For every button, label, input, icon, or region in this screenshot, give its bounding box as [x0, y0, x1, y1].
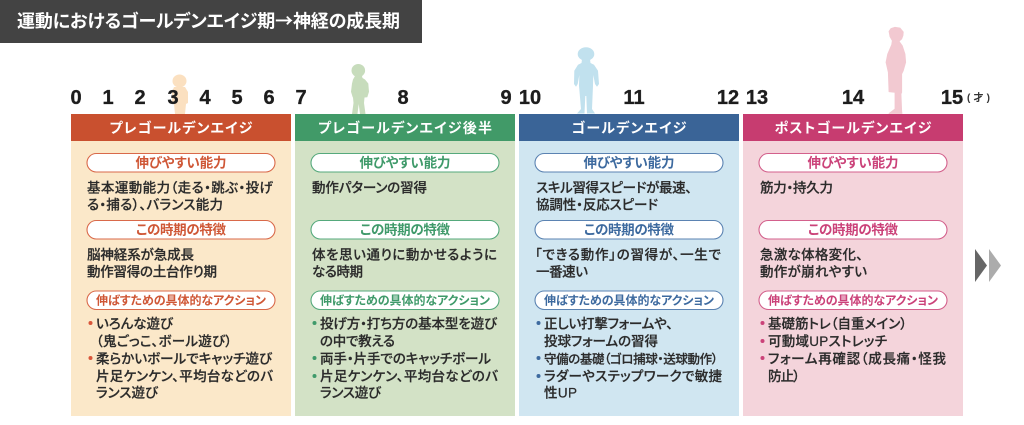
text: features 3: 「できる動作」の習得が、一生で — [535, 246, 721, 262]
age scale — [70, 87, 990, 109]
list: actions 2: 片足ケンケン、平均台などのバ — [320, 368, 499, 384]
text: abilities 4: 筋力・持久力 — [760, 180, 833, 196]
list: actions 1: いろんな遊び — [96, 316, 174, 332]
list: actions 3: 性UP — [544, 386, 577, 400]
heading: panel 4: ポストゴールデンエイジ — [774, 120, 932, 136]
text: abilities 3 — [536, 180, 692, 212]
pill: actions 3: 伸ばすための具体的なアクション — [544, 292, 714, 308]
pill: actions 2: 伸ばすための具体的なアクション — [320, 292, 490, 308]
list: actions 4: フォーム再確認（成長痛・怪我 — [768, 350, 946, 366]
age scale: 11 — [623, 87, 645, 109]
text: features 4 — [760, 246, 867, 280]
list: actions 2: 投げ方・打ち方の基本型を遊び — [320, 316, 498, 332]
text: abilities 1: 基本運動能力（走る・跳ぶ・投げ — [87, 180, 274, 196]
list: actions 3: 投球フォームの習得 — [544, 333, 658, 349]
list: actions 3: ラダーやステップワークで敏捷 — [544, 368, 722, 384]
text: abilities 1 — [87, 180, 274, 212]
arrow: continue right — [975, 249, 1001, 282]
pill: features 2 — [311, 220, 499, 239]
text: features 3: 一番速い — [536, 264, 588, 280]
list: actions 3: 正しい打撃フォームや、 — [544, 316, 673, 332]
list: actions 2 — [312, 316, 499, 400]
text: features 2 — [312, 248, 497, 280]
pill: actions 1: 伸ばすための具体的なアクション — [96, 292, 266, 308]
heading: panel 2: プレゴールデンエイジ後半 — [318, 120, 492, 136]
text: abilities 2: 動作パターンの習得 — [312, 180, 427, 196]
list: actions 1 — [88, 316, 274, 400]
list: actions 1: 片足ケンケン、平均台などのバ — [96, 368, 274, 384]
figure: child — [351, 64, 369, 114]
age scale: 8 — [397, 87, 409, 109]
title bar — [0, 0, 422, 43]
text: features 1 — [87, 246, 217, 280]
pill: actions 4: 伸ばすための具体的なアクション — [768, 292, 938, 308]
list: actions 4: 可動域UPストレッチ — [768, 334, 887, 349]
age scale: 4 — [199, 87, 211, 109]
pill: features 3 — [535, 220, 723, 239]
list: actions 2: の中で教える — [320, 334, 395, 349]
heading: panel 3: ゴールデンエイジ — [572, 120, 687, 136]
heading: panel 1: プレゴールデンエイジ — [110, 120, 253, 136]
pill: abilities 3: 伸びやすい能力 — [584, 154, 674, 170]
text: abilities 3: 協調性・反応スピード — [536, 198, 658, 212]
list: actions 1: （鬼ごっこ、ボール遊び） — [96, 333, 232, 349]
pill: features 2: この時期の特徴 — [360, 222, 450, 238]
panel: ゴールデンエイジ — [519, 114, 739, 416]
text: abilities 1: る・捕る）、バランス能力 — [87, 198, 223, 212]
panel: ポストゴールデンエイジ — [743, 114, 963, 416]
pill: actions 2 — [311, 291, 499, 310]
list: actions 3: 守備の基礎（ゴロ捕球・送球動作） — [544, 352, 718, 366]
pill: features 4 — [759, 220, 947, 239]
age scale: 2 — [134, 87, 146, 109]
text: features 1: 動作習得の土台作り期 — [87, 264, 217, 280]
pill: abilities 2: 伸びやすい能力 — [360, 154, 450, 170]
pill: actions 1 — [87, 291, 275, 310]
age scale: (才) — [967, 91, 990, 104]
age scale: 14 — [842, 87, 865, 109]
text: abilities 3: スキル習得スピードが最速、 — [536, 180, 692, 196]
pill: abilities 4: 伸びやすい能力 — [808, 154, 898, 170]
figure: young child — [172, 74, 188, 114]
pill: features 1 — [87, 220, 275, 239]
age scale: 13 — [746, 87, 768, 109]
pill: features 1: この時期の特徴 — [136, 222, 226, 238]
text: features 3 — [535, 246, 721, 280]
panel: プレゴールデンエイジ — [71, 114, 291, 416]
age scale: 6 — [263, 87, 275, 109]
age scale: 1 — [102, 87, 114, 109]
pill: actions 4 — [759, 291, 947, 310]
figure: boy front view — [574, 47, 599, 114]
text: features 1: 脳神経系が急成長 — [87, 246, 194, 262]
figure: teen side view — [886, 27, 906, 113]
age scale: 12 — [717, 87, 739, 109]
age scale: 10 — [519, 87, 541, 109]
pill: abilities 1 — [87, 154, 275, 172]
list: actions 4: 基礎筋トレ（自重メイン） — [768, 316, 907, 332]
age scale: 15 — [941, 87, 963, 109]
list: actions 1: ランス遊び — [96, 386, 159, 400]
age scale: 3 — [167, 87, 179, 109]
pill: abilities 1: 伸びやすい能力 — [136, 154, 226, 170]
pill: abilities 4 — [759, 154, 947, 172]
list: actions 2: 両手・片手でのキャッチボール — [320, 350, 491, 366]
panel: プレゴールデンエイジ後半 — [295, 114, 515, 416]
text: features 2: 体を思い通りに動かせるように — [312, 248, 497, 262]
pill: features 3: この時期の特徴 — [584, 222, 674, 238]
pill: abilities 2 — [311, 154, 499, 172]
age scale: 9 — [500, 87, 512, 109]
title bar: 運動におけるゴールデンエイジ期→神経の成長期 — [17, 8, 400, 34]
age scale: 7 — [295, 87, 307, 109]
list: actions 4: 防止） — [768, 369, 800, 384]
list: actions 3 — [536, 316, 722, 400]
list: actions 1: 柔らかいボールでキャッチ遊び — [96, 352, 273, 366]
text: features 4: 急激な体格変化、 — [760, 246, 863, 262]
age scale: 5 — [231, 87, 243, 109]
pill: features 4: この時期の特徴 — [808, 222, 898, 238]
pill: abilities 3 — [535, 154, 723, 172]
list: actions 4 — [760, 316, 946, 384]
text: features 4: 動作が崩れやすい — [760, 264, 867, 280]
list: actions 2: ランス遊び — [320, 386, 382, 400]
pill: actions 3 — [535, 291, 723, 310]
age scale: 0 — [70, 87, 82, 109]
text: features 2: なる時期 — [312, 264, 363, 280]
